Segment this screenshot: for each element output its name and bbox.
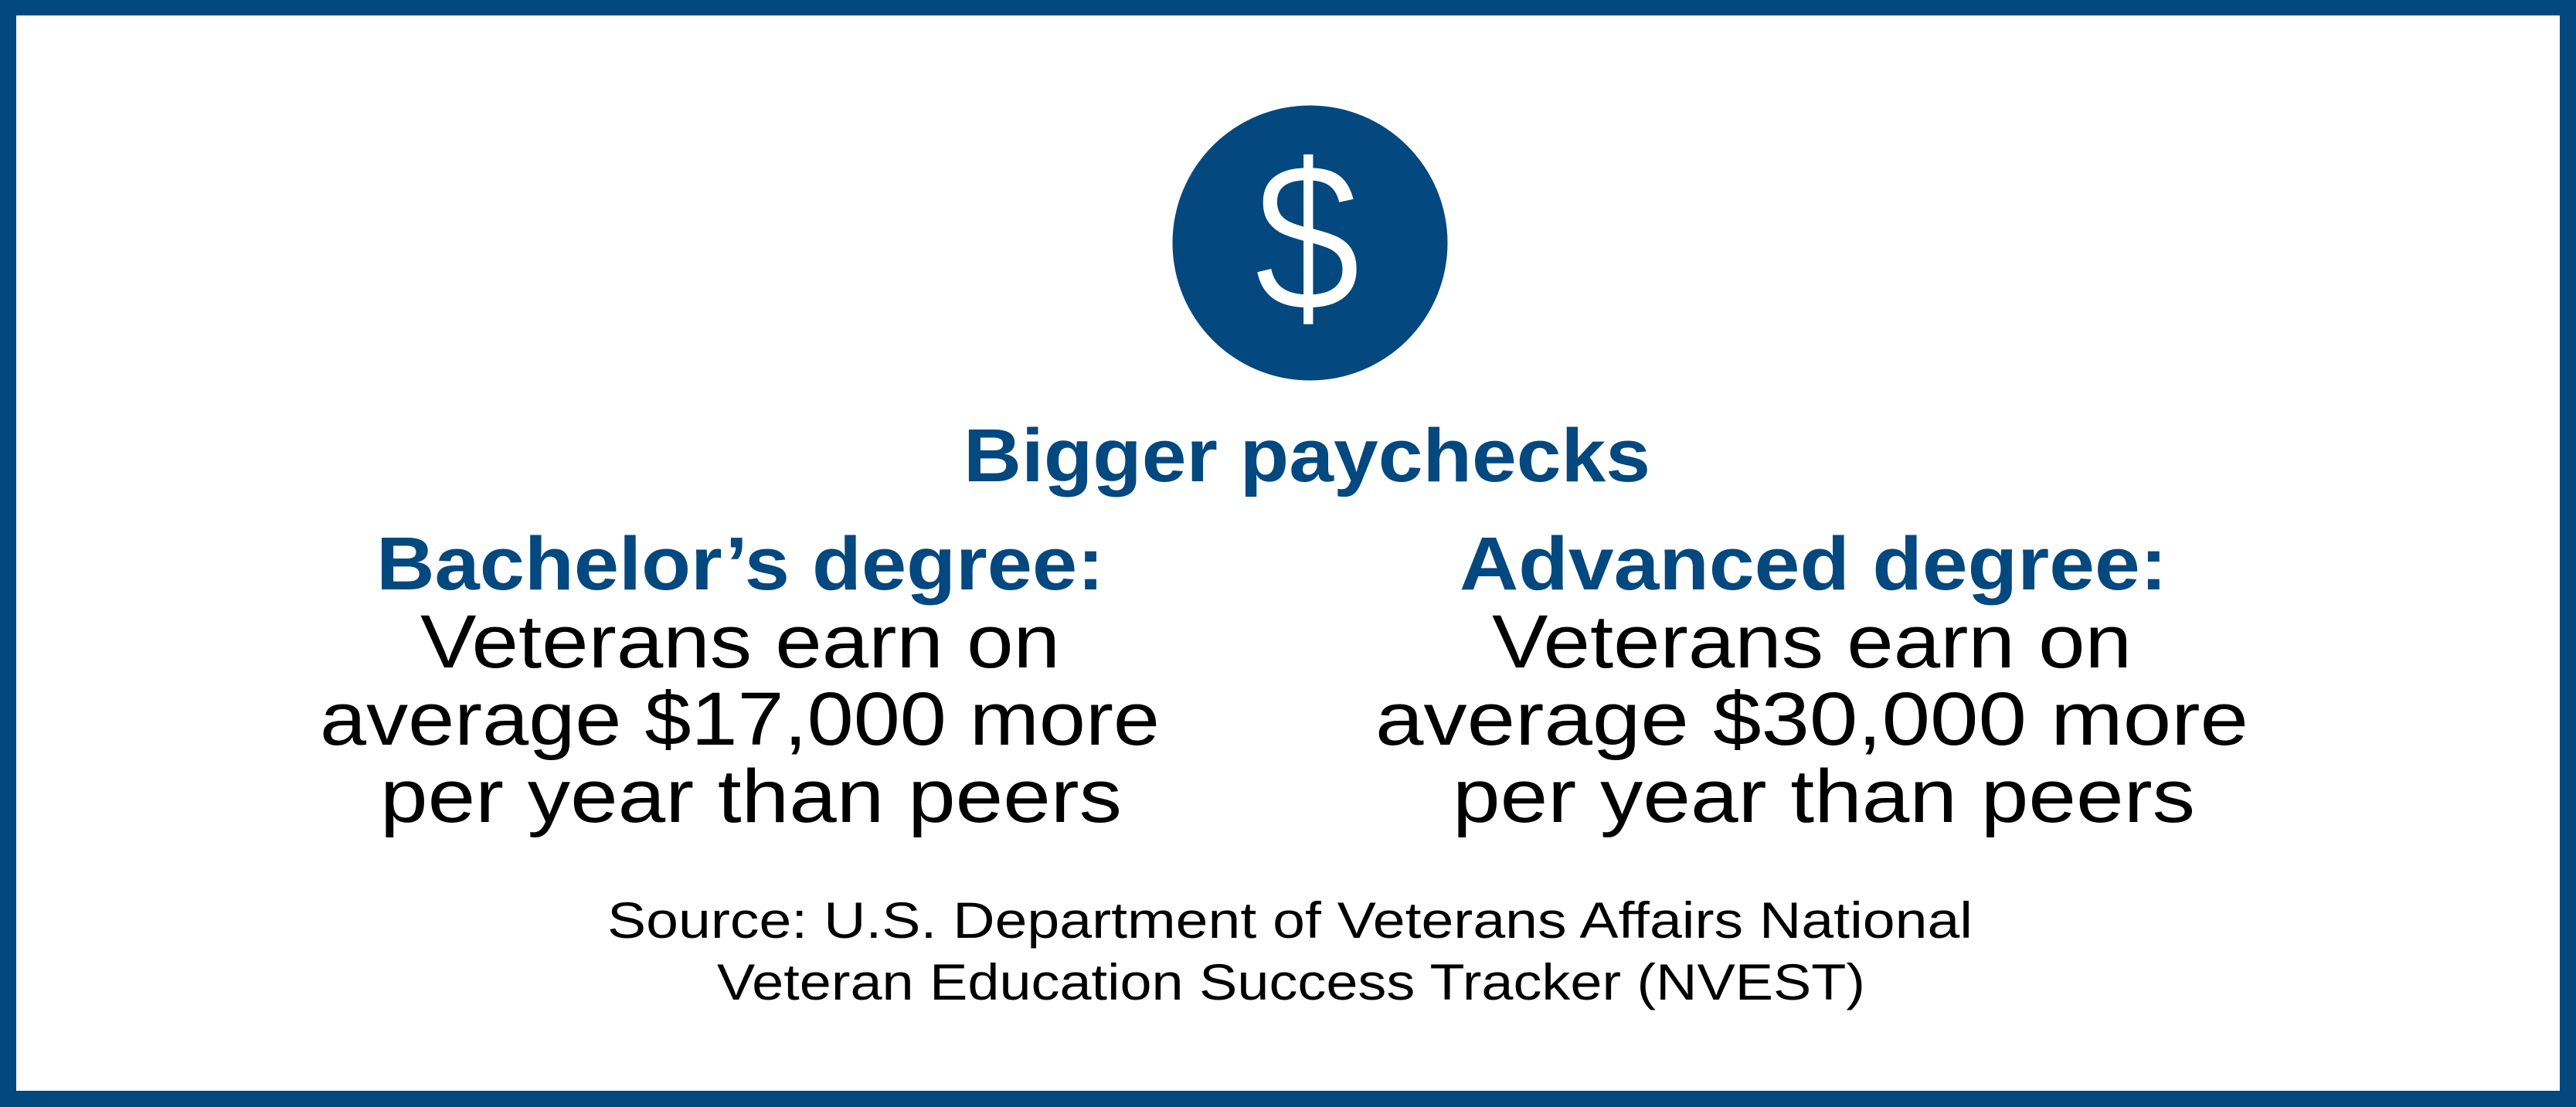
text block: bachelor's earnings — [320, 599, 1160, 838]
text block: advanced earnings: average $30,000 more — [1375, 677, 2248, 761]
heading: Bachelor's degree: Bachelor’s degree: — [376, 521, 1104, 606]
text block: bachelor's earnings: Veterans earn on — [420, 599, 1060, 684]
heading: Advanced degree: Advanced degree: — [1460, 521, 2167, 606]
icon: dollar sign in circle: $ — [1254, 119, 1361, 356]
panel: bachelor's degree column — [320, 521, 1160, 838]
text block: bachelor's earnings: per year than peers — [380, 754, 1122, 838]
icon: dollar sign in circle — [1173, 105, 1448, 380]
panel: advanced degree column — [1375, 521, 2248, 838]
text block: source citation: Source: U.S. Department of Veterans Affairs National — [607, 891, 1973, 949]
heading: Bigger paychecks: Bigger paychecks — [963, 413, 1650, 497]
text block: source citation — [607, 891, 1973, 1010]
text block: advanced earnings: Veterans earn on — [1492, 599, 2132, 684]
text block: advanced earnings — [1375, 599, 2248, 838]
text block: source citation: Veteran Education Success Tracker (NVEST) — [717, 953, 1865, 1010]
text block: bachelor's earnings: average $17,000 more — [320, 677, 1160, 761]
text block: advanced earnings: per year than peers — [1453, 754, 2195, 838]
